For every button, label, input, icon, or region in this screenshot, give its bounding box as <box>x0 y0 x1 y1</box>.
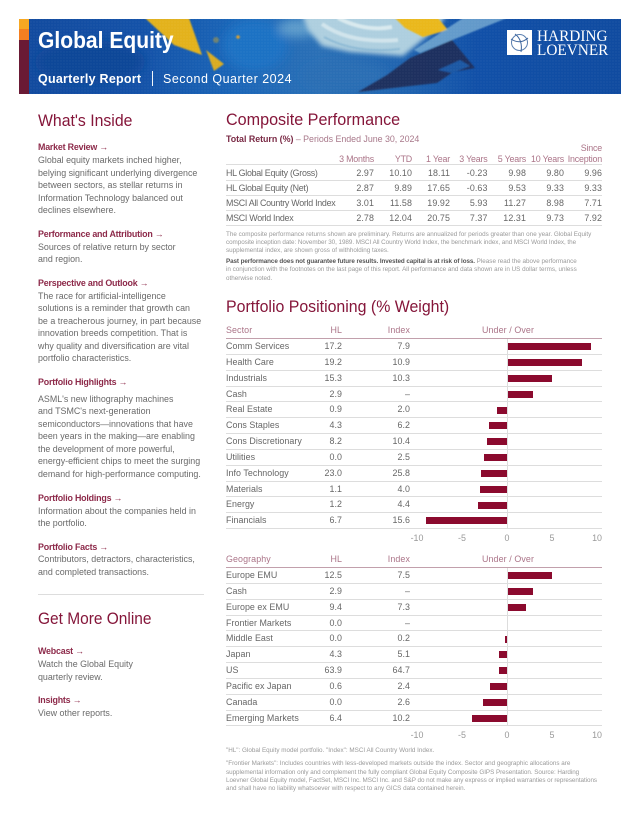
row: MSCI World Index <box>226 211 602 226</box>
row: Japan <box>226 647 602 663</box>
row: MSCI World Index: MSCI World Index <box>226 213 293 223</box>
row: MSCI All Country World Index <box>226 196 602 211</box>
geography axis ticks <box>411 730 602 740</box>
item: Portfolio Facts: Portfolio Facts → <box>38 542 108 552</box>
geography axis ticks: 5 <box>550 730 554 740</box>
footnotes: and shall have no liability whatsoever with respect to any GICS data contained herein. <box>226 785 465 792</box>
row: HL Global Equity (Net): 9.33 <box>584 183 602 193</box>
geography header: Index <box>388 554 410 564</box>
performance notes: composite inception date: November 30, 1989. MSCI All Country World Index, the benchmark index, and MSCI World Index, the <box>226 239 576 246</box>
row: MSCI World Index: 7.37 <box>470 213 488 223</box>
row: MSCI World Index: 9.73 <box>546 213 564 223</box>
row: Cash: Cash <box>226 389 247 399</box>
row: Canada: 0.0 <box>330 697 342 707</box>
row: Emerging Markets <box>226 711 602 726</box>
row: HL Global Equity (Net): -0.63 <box>467 183 488 193</box>
row: Materials: Materials <box>226 484 262 494</box>
row: Canada: Canada <box>226 697 257 707</box>
row: Comm Services <box>226 339 602 355</box>
row: HL Global Equity (Net): 17.65 <box>427 183 450 193</box>
row: MSCI All Country World Index: 19.92 <box>427 198 450 208</box>
sector axis ticks <box>411 533 602 543</box>
row: HL Global Equity (Gross): 9.98 <box>508 168 526 178</box>
row: Europe EMU: 7.5 <box>398 570 410 580</box>
row: MSCI All Country World Index: MSCI All Country World Index <box>226 198 335 208</box>
row: Health Care: 10.9 <box>393 357 410 367</box>
geography axis ticks: 10 <box>592 730 602 740</box>
row: Real Estate: Real Estate <box>226 404 272 414</box>
row: HL Global Equity (Gross): 9.80 <box>546 168 564 178</box>
banner painting <box>29 19 621 94</box>
row: Middle East: 0.0 <box>330 633 342 643</box>
item: Perspective and Outlook: innovation breeds competition. That is <box>38 328 187 338</box>
item: Webcast <box>38 646 133 682</box>
header banner <box>19 19 621 94</box>
item: Market Review: Global equity markets inched higher, <box>38 155 182 165</box>
row: Emerging Markets: Emerging Markets <box>226 713 299 723</box>
table header: 1 Year <box>426 154 450 164</box>
sector axis ticks: 5 <box>550 533 554 543</box>
row: Info Technology: Info Technology <box>226 468 289 478</box>
row: Cons Staples: Cons Staples <box>226 420 279 430</box>
row: Energy: Energy <box>226 499 254 509</box>
item: Portfolio Highlights: energy-efficient chips to meet the surging <box>38 456 200 466</box>
footnotes: "Frontier Markets": Includes countries with less-developed markets outside the index. Sector and geographic allocations are <box>226 760 570 767</box>
table header: 5 Years <box>498 154 526 164</box>
geography header: HL <box>330 554 342 564</box>
item: Portfolio Facts: and completed transactions. <box>38 566 149 576</box>
row: Real Estate <box>226 402 602 418</box>
item: Performance and Attribution: and region. <box>38 254 82 264</box>
item: Portfolio Highlights: been years in the making—are enabling <box>38 431 195 441</box>
row: Frontier Markets: 0.0 <box>330 618 342 628</box>
row: Comm Services: 7.9 <box>398 341 410 351</box>
icon: globe mark <box>507 30 532 55</box>
row: Energy <box>226 497 602 513</box>
item: Portfolio Highlights: demand for high-performance computing. <box>38 468 201 478</box>
row: Cons Discretionary: 10.4 <box>393 436 410 446</box>
row: Canada <box>226 695 602 711</box>
row: Info Technology: 23.0 <box>325 468 342 478</box>
table header: 10 Years <box>531 154 564 164</box>
geography header <box>226 552 602 568</box>
row: Emerging Markets: 10.2 <box>393 713 410 723</box>
item: Portfolio Highlights: and TSMC's next-generation <box>38 406 151 416</box>
row: MSCI World Index: 12.31 <box>503 213 526 223</box>
item: Portfolio Highlights: Portfolio Highlights → <box>38 377 127 387</box>
item: Insights: View other reports. <box>38 708 112 718</box>
row: MSCI World Index: 2.78 <box>356 213 374 223</box>
row: Pacific ex Japan: 0.6 <box>330 681 342 691</box>
item: Market Review: Market Review → <box>38 142 108 152</box>
item: Portfolio Highlights: the development of more powerful, <box>38 444 175 454</box>
row: HL Global Equity (Gross) <box>226 166 602 181</box>
row: Health Care: 19.2 <box>325 357 342 367</box>
geography chart <box>226 554 602 740</box>
geography axis ticks: -10 <box>411 730 423 740</box>
row: Pacific ex Japan <box>226 679 602 695</box>
item: Portfolio Highlights: semiconductors—innovations that have <box>38 418 193 428</box>
row: Canada: 2.6 <box>398 697 410 707</box>
sector chart <box>226 325 602 543</box>
row: HL Global Equity (Gross): 10.10 <box>389 168 412 178</box>
row: Materials: 1.1 <box>330 484 342 494</box>
item: Performance and Attribution: Sources of relative return by sector <box>38 242 176 252</box>
row: MSCI All Country World Index: 5.93 <box>470 198 488 208</box>
row: Financials <box>226 513 602 529</box>
row: HL Global Equity (Gross): 9.96 <box>584 168 602 178</box>
row: Utilities: 2.5 <box>398 452 410 462</box>
performance notes: Past performance does not guarantee future results. Invested capital is at risk of loss. Please read the above performance <box>226 258 577 265</box>
row: Cash <box>226 387 602 402</box>
item: Perspective and Outlook: portfolio characteristics. <box>38 353 131 363</box>
row: MSCI All Country World Index: 11.58 <box>390 198 412 208</box>
table header: YTD <box>395 154 412 164</box>
table header: 3 Years <box>459 154 488 164</box>
item: Market Review: Information Technology balanced out <box>38 192 183 202</box>
row: Materials: 4.0 <box>398 484 410 494</box>
row: Frontier Markets: Frontier Markets <box>226 618 291 628</box>
banner subtitle: Second Quarter 2024 <box>163 72 292 86</box>
row: Cons Staples: 4.3 <box>330 420 342 430</box>
item: Market Review: declines elsewhere. <box>38 205 116 215</box>
row: MSCI All Country World Index: 3.01 <box>356 198 374 208</box>
row: MSCI All Country World Index: 11.27 <box>504 198 526 208</box>
banner title: Global Equity <box>38 27 174 53</box>
row: Cons Staples: 6.2 <box>398 420 410 430</box>
row: Financials: 15.6 <box>393 515 410 525</box>
item: Perspective and Outlook: why quality and diversification are vital <box>38 341 189 351</box>
colour stripe <box>19 19 29 94</box>
sector axis ticks: 0 <box>505 533 509 543</box>
row: Industrials <box>226 371 602 387</box>
geography axis ticks: -5 <box>458 730 466 740</box>
row: Info Technology <box>226 466 602 482</box>
row: US: 64.7 <box>393 665 410 675</box>
row: Emerging Markets: 6.4 <box>330 713 342 723</box>
row: HL Global Equity (Net): HL Global Equity (Net) <box>226 183 308 193</box>
row: MSCI World Index: 7.92 <box>584 213 602 223</box>
row: Middle East: Middle East <box>226 633 273 643</box>
row: Europe EMU <box>226 568 602 584</box>
item: Perspective and Outlook: be a treacherous journey, in part because <box>38 316 201 326</box>
item: Portfolio Holdings: the portfolio. <box>38 518 87 528</box>
sector header: Index <box>388 325 410 335</box>
row: Middle East <box>226 631 602 647</box>
item: Performance and Attribution: Performance and Attribution → <box>38 229 164 239</box>
row: Energy: 1.2 <box>330 499 342 509</box>
performance notes <box>226 230 592 282</box>
table header: 3 Months <box>339 154 374 164</box>
row: Cons Staples <box>226 418 602 434</box>
geography header: Under / Over <box>482 554 534 564</box>
row: HL Global Equity (Gross): 2.97 <box>356 168 374 178</box>
item: Insights <box>38 695 112 718</box>
logo: Harding Loevner <box>507 28 608 59</box>
sector header: Sector <box>226 325 252 335</box>
row: Health Care: Health Care <box>226 357 274 367</box>
row: Utilities: 0.0 <box>330 452 342 462</box>
row: Pacific ex Japan: 2.4 <box>398 681 410 691</box>
row: HL Global Equity (Net) <box>226 181 602 196</box>
row: Real Estate: 2.0 <box>398 404 410 414</box>
row: US: 63.9 <box>325 665 342 675</box>
row: Real Estate: 0.9 <box>330 404 342 414</box>
row: MSCI World Index: 12.04 <box>389 213 412 223</box>
row: US <box>226 663 602 679</box>
row: Materials <box>226 482 602 497</box>
geography header: Geography <box>226 554 271 564</box>
row: Cons Discretionary <box>226 434 602 450</box>
item: Portfolio Highlights <box>38 377 201 479</box>
row: Industrials: 10.3 <box>393 373 410 383</box>
row: Europe ex EMU <box>226 600 602 616</box>
row: Cash: – <box>405 586 410 596</box>
banner subtitle: Quarterly Report <box>38 72 141 86</box>
row: Utilities: Utilities <box>226 452 255 462</box>
item: Insights: Insights → <box>38 695 81 705</box>
item: Market Review <box>38 142 197 215</box>
heading: Get More Online: Get More Online <box>38 609 152 628</box>
item: Portfolio Facts: Contributors, detractors, characteristics, <box>38 554 195 564</box>
sector axis ticks: 10 <box>592 533 602 543</box>
row: Health Care <box>226 355 602 371</box>
performance notes: supplemental index, are shown gross of withholding taxes. <box>226 247 389 254</box>
row: Europe ex EMU: Europe ex EMU <box>226 602 289 612</box>
performance notes: The composite performance returns shown are preliminary. Returns are annualized for periods greater than one year. Global Equity <box>226 230 591 238</box>
row: Industrials: Industrials <box>226 373 267 383</box>
row: HL Global Equity (Gross): -0.23 <box>467 168 488 178</box>
row: Japan: 5.1 <box>398 649 410 659</box>
logo wordmark: HARDING <box>537 28 608 45</box>
row: Middle East: 0.2 <box>398 633 410 643</box>
row: US: US <box>226 665 238 675</box>
row: Industrials: 15.3 <box>325 373 342 383</box>
footnotes: "HL": Global Equity model portfolio. "Index": MSCI All Country World Index. <box>226 747 434 754</box>
row: Comm Services: 17.2 <box>325 341 342 351</box>
heading: Portfolio Positioning: Portfolio Positioning (% Weight) <box>226 297 449 316</box>
performance notes: in conjunction with the footnotes on the last page of this report. All performance and data shown are in US dollar terms, unless <box>226 266 577 273</box>
item: Portfolio Holdings: Information about the companies held in <box>38 506 196 516</box>
item: Performance and Attribution <box>38 229 176 264</box>
sector header <box>226 323 602 339</box>
row: Europe EMU: Europe EMU <box>226 570 277 580</box>
sector axis ticks: -5 <box>458 533 466 543</box>
item: Portfolio Facts <box>38 542 195 577</box>
row: HL Global Equity (Net): 9.53 <box>508 183 526 193</box>
item: Market Review: between sectors, as stellar returns in <box>38 180 183 190</box>
sector header: HL <box>330 325 342 335</box>
item: Webcast: Watch the Global Equity <box>38 659 133 669</box>
subheading: Total Return: Total Return (%) – Periods Ended June 30, 2024 <box>226 134 419 144</box>
table header: Since <box>581 142 602 152</box>
row: Europe ex EMU: 7.3 <box>398 602 410 612</box>
row: MSCI All Country World Index: 8.98 <box>546 198 564 208</box>
item: Perspective and Outlook: solutions is a reminder that growth can <box>38 303 190 313</box>
row: Cons Discretionary: 8.2 <box>330 436 342 446</box>
row: HL Global Equity (Net): 2.87 <box>356 183 374 193</box>
sector header: Under / Over <box>482 325 534 335</box>
item: Portfolio Highlights: ASML's new lithography machines <box>38 394 173 404</box>
row: Cash <box>226 584 602 600</box>
item: Perspective and Outlook: Perspective and Outlook → <box>38 278 148 288</box>
row: Cash: 2.9 <box>330 389 342 399</box>
item: Market Review: belying significant underlying divergence <box>38 168 197 178</box>
row: Europe EMU: 12.5 <box>325 570 342 580</box>
performance notes: otherwise noted. <box>226 274 272 282</box>
item: Perspective and Outlook <box>38 278 201 363</box>
row: Cash: Cash <box>226 586 247 596</box>
row: Cash: – <box>405 389 410 399</box>
row: Info Technology: 25.8 <box>393 468 410 478</box>
item: Portfolio Holdings <box>38 493 196 528</box>
performance table <box>226 142 602 226</box>
heading: Composite Performance: Composite Performance <box>226 110 400 129</box>
item: Portfolio Holdings: Portfolio Holdings → <box>38 493 122 503</box>
footnotes: Loevner Global Equity model, FactSet, MSCI Inc. MSCI Inc. and S&P do not make any express or implied warranties or representations <box>226 777 597 784</box>
item: Perspective and Outlook: The race for artificial-intelligence <box>38 291 166 301</box>
row: HL Global Equity (Gross): HL Global Equity (Gross) <box>226 168 318 178</box>
table header: Inception <box>568 154 602 164</box>
row: HL Global Equity (Net): 9.33 <box>546 183 564 193</box>
row: HL Global Equity (Gross): 18.11 <box>428 168 450 178</box>
row: Japan: 4.3 <box>330 649 342 659</box>
logo wordmark <box>537 28 608 59</box>
row: HL Global Equity (Net): 9.89 <box>394 183 412 193</box>
logo wordmark: LOEVNER <box>537 42 608 59</box>
row: Japan: Japan <box>226 649 250 659</box>
table header <box>226 140 602 165</box>
row: Europe ex EMU: 9.4 <box>330 602 342 612</box>
row: Financials: 6.7 <box>330 515 342 525</box>
row: Pacific ex Japan: Pacific ex Japan <box>226 681 291 691</box>
row: MSCI All Country World Index: 7.71 <box>584 198 602 208</box>
row: Comm Services: Comm Services <box>226 341 289 351</box>
item: Webcast: Webcast → <box>38 646 84 656</box>
row: Cash: 2.9 <box>330 586 342 596</box>
sector axis ticks: -10 <box>411 533 423 543</box>
row: MSCI World Index: 20.75 <box>427 213 450 223</box>
row: Cons Discretionary: Cons Discretionary <box>226 436 302 446</box>
footnotes <box>226 747 597 792</box>
heading: What's Inside: What's Inside <box>38 111 132 130</box>
banner subtitle <box>38 71 292 86</box>
row: Frontier Markets: – <box>405 618 410 628</box>
item: Webcast: quarterly review. <box>38 672 103 682</box>
row: Energy: 4.4 <box>398 499 410 509</box>
row: Utilities <box>226 450 602 466</box>
geography axis ticks: 0 <box>505 730 509 740</box>
footnotes: supplemental information only and complement the fully compliant Global Equity Composite GIPS Presentation. Source: Harding <box>226 768 579 776</box>
row: Financials: Financials <box>226 515 266 525</box>
row: Frontier Markets <box>226 616 602 631</box>
